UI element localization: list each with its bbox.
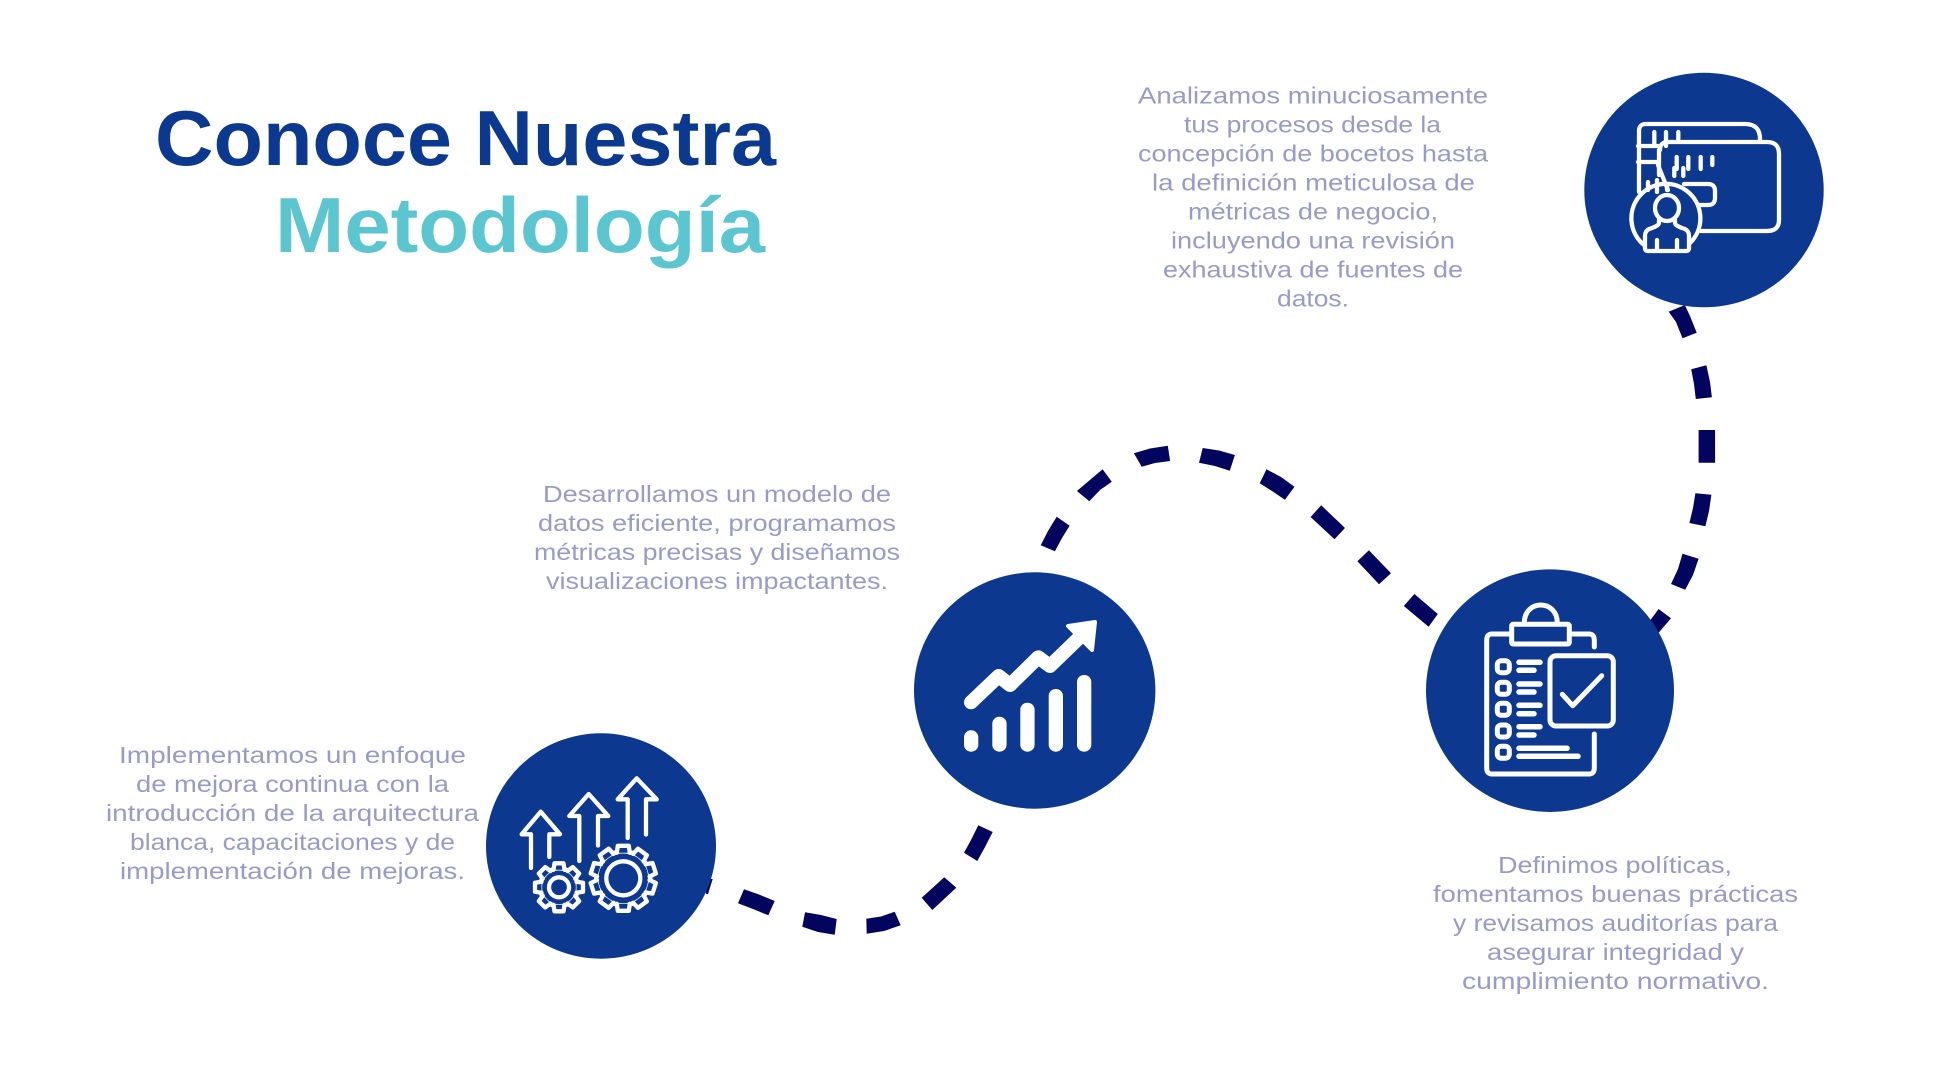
text block: continuous improvement: de mejora continua con la (136, 771, 450, 797)
step: continuous improvement circle (486, 733, 716, 959)
icon: growth chart with arrow (964, 622, 1095, 752)
text block: analysis: datos. (1277, 285, 1349, 311)
text block: development: Desarrollamos un modelo de (543, 481, 891, 507)
text block: continuous improvement: implementación de mejoras. (120, 858, 465, 884)
step: development circle (914, 572, 1155, 809)
icon: gears with rising arrows (522, 778, 657, 911)
text block: analysis: tus procesos desde la (1184, 111, 1442, 137)
text block: continuous improvement: blanca, capacitaciones y de (130, 829, 455, 855)
text block: analysis (1138, 82, 1489, 311)
text block: analysis: Analizamos minuciosamente (1138, 82, 1488, 108)
text block: development (534, 481, 900, 594)
text block: continuous improvement (106, 742, 480, 884)
text block: governance: y revisamos auditorías para (1453, 910, 1779, 936)
text block: governance: Definimos políticas, (1498, 852, 1732, 878)
text block: development: visualizaciones impactantes. (546, 568, 888, 594)
title: Metodología (275, 183, 766, 269)
text block: analysis: métricas de negocio, (1188, 198, 1438, 224)
text block: analysis: exhaustiva de fuentes de (1163, 256, 1463, 282)
text block: analysis: la definición meticulosa de (1152, 169, 1475, 195)
text block: governance: asegurar integridad y (1487, 939, 1744, 965)
title (155, 96, 777, 269)
icon: windows with user profile (1631, 124, 1779, 251)
title: Conoce Nuestra (155, 96, 777, 182)
text block: development: datos eficiente, programamos (538, 510, 896, 536)
step: analysis circle (1584, 73, 1824, 307)
text block: analysis: incluyendo una revisión (1171, 227, 1455, 253)
text block: continuous improvement: introducción de la arquitectura (106, 800, 480, 826)
text block: governance (1433, 852, 1798, 994)
dashed path connecting the steps (706, 305, 1715, 935)
icon: clipboard checklist (1487, 605, 1613, 774)
text block: continuous improvement: Implementamos un enfoque (119, 742, 466, 768)
step: governance circle (1426, 569, 1674, 812)
text block: governance: cumplimiento normativo. (1462, 968, 1769, 994)
text block: development: métricas precisas y diseñamos (534, 539, 900, 565)
text block: governance: fomentamos buenas prácticas (1433, 881, 1798, 907)
text block: analysis: concepción de bocetos hasta (1138, 140, 1489, 166)
